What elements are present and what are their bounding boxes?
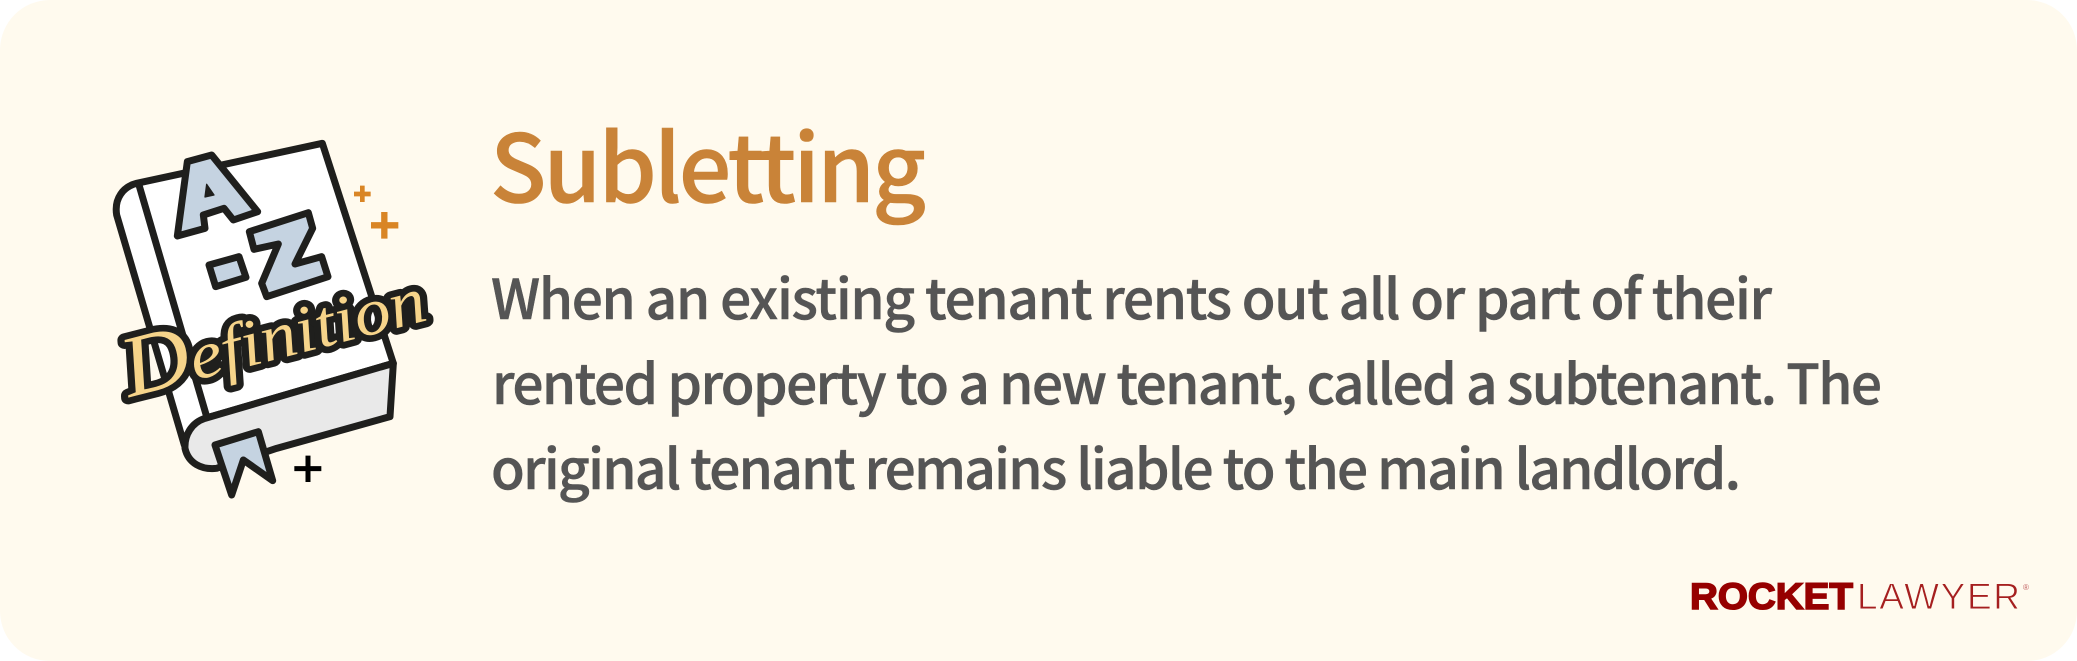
black sparkle	[294, 456, 321, 482]
body line 3: original tenant remains liable to the main landlord.	[491, 425, 1741, 505]
orange sparkles	[354, 186, 371, 202]
hyphen	[209, 257, 246, 287]
definition script label: Definition	[109, 245, 434, 416]
letter A	[177, 155, 258, 236]
book bottom page block	[185, 363, 393, 469]
logo bold word: ROCKET	[1690, 576, 1853, 617]
book spine line	[139, 185, 207, 417]
body line 2: rented property to a new tenant, called a subtenant. The	[492, 340, 1882, 420]
letter A counter	[205, 184, 214, 197]
logo light word: LAWYER	[1857, 576, 2020, 617]
book cover and pages	[116, 143, 393, 445]
body text	[491, 255, 1882, 505]
icon: A-Z definition book	[109, 143, 434, 495]
heading: Subletting	[490, 94, 926, 229]
large orange sparkle	[371, 212, 398, 239]
letter Z	[249, 213, 328, 297]
body line 1: When an existing tenant rents out all or part of their	[491, 255, 1772, 335]
logo: Rocket Lawyer	[1690, 576, 2029, 617]
bookmark	[215, 432, 273, 495]
logo registered mark: ®	[2023, 583, 2029, 592]
